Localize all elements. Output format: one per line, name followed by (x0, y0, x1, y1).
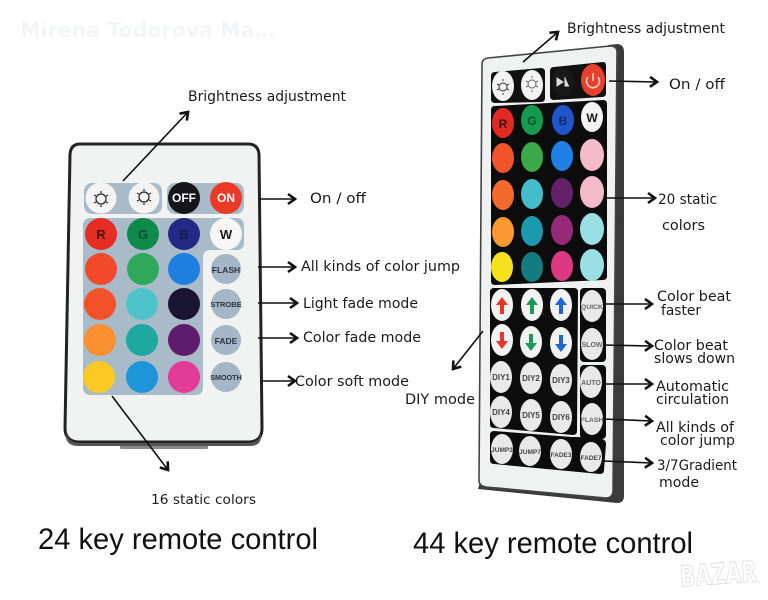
label: 20 static colors: colors (662, 218, 705, 234)
arrow: color beat slows (603, 345, 652, 346)
label: gradient mode: mode (659, 475, 699, 491)
label: color jump right: color jump (660, 433, 735, 449)
mode buttons: FLASH (212, 265, 240, 275)
DIY buttons: DIY3 (552, 376, 570, 385)
colour buttons (83, 218, 242, 393)
label: color jump left: All kinds of color jump (301, 259, 460, 275)
label: color fade: Color fade mode (303, 330, 421, 346)
speed and function buttons: FLASH (581, 417, 603, 424)
title: 24 key remote control: 24 key remote control (38, 523, 318, 556)
label: color soft: Color soft mode (295, 374, 409, 390)
top right button group (550, 62, 606, 100)
colour buttons: B (179, 227, 189, 242)
arrow: on off right (609, 81, 657, 82)
arrow buttons (491, 289, 572, 359)
colour panel (491, 100, 607, 285)
remote body (479, 46, 617, 498)
colour buttons (491, 102, 604, 282)
jump panel (490, 431, 606, 474)
DIY buttons: DIY5 (522, 411, 540, 420)
speed and function buttons: QUICK (581, 304, 603, 311)
jump and fade buttons: JUMP3 (491, 447, 513, 454)
jump and fade buttons: FADE3 (551, 452, 572, 459)
arrow: 20 static colors (605, 197, 655, 199)
colour button panel (83, 218, 244, 395)
label: brightness right: Brightness adjustment (567, 21, 726, 37)
panel: 24 key remote (65, 144, 262, 449)
label: color beat faster: faster (661, 303, 701, 319)
brightness button group (84, 182, 162, 214)
arrow: DIY mode (453, 331, 483, 369)
jump and fade buttons (491, 434, 602, 472)
top left button group (491, 68, 545, 103)
colour buttons: B (559, 114, 568, 128)
arrow: brightness left (123, 112, 188, 181)
colour buttons: W (220, 227, 233, 242)
arrow: color beat faster (603, 303, 652, 305)
arrow: color jump right (603, 419, 652, 421)
speed and function buttons: SLOW (582, 342, 603, 349)
mode buttons: STROBE (210, 300, 242, 309)
arrow: brightness right (523, 32, 558, 62)
arrow: color soft (260, 380, 295, 382)
label: color beat slows (654, 338, 735, 367)
arrow: light fade (258, 302, 297, 304)
arrow: color jump left (258, 266, 295, 268)
speed and function buttons (580, 290, 603, 435)
remote bottom edge (66, 432, 261, 446)
label: light fade: Light fade mode (303, 296, 418, 312)
label: on off left: On / off (310, 191, 366, 207)
DIY buttons: DIY2 (522, 374, 540, 383)
DIY buttons: DIY6 (552, 413, 570, 422)
mode buttons: SMOOTH (210, 373, 242, 382)
label: automatic circulation: Automatic (656, 379, 729, 395)
colour buttons: R (96, 227, 106, 242)
remote body (65, 144, 262, 442)
label: color beat slows: Color beat (654, 338, 729, 354)
top buttons (492, 64, 605, 101)
colour buttons: G (527, 114, 537, 128)
label: gradient mode (657, 458, 737, 491)
arrow: gradient mode (603, 461, 652, 463)
power button group: ON (217, 191, 235, 205)
arrow and DIY panel (490, 288, 578, 435)
DIY buttons: DIY1 (492, 373, 510, 382)
watermark: seller name: Mirena Todorova Ma… (20, 18, 275, 42)
arrow: 16 static colors (112, 396, 168, 470)
label: on off right: On / off (669, 77, 725, 93)
colour buttons: G (138, 227, 148, 242)
label: automatic circulation (656, 379, 729, 408)
colour buttons: W (586, 111, 598, 125)
arrow: automatic circulation (603, 383, 652, 385)
label: color beat slows: slows down (654, 351, 735, 367)
speed and function buttons: AUTO (581, 380, 601, 387)
label: 20 static colors: 20 static (658, 192, 717, 208)
label: 16 static colors: 16 static colors (151, 493, 256, 508)
label: color beat faster: Color beat (657, 289, 732, 305)
panel: 44 key remote (478, 44, 624, 503)
DIY buttons (490, 361, 572, 433)
colour buttons: R (499, 117, 508, 131)
label: brightness left: Brightness adjustment (188, 89, 347, 105)
arrow: color fade (258, 337, 297, 339)
arrow: on off left (259, 198, 295, 200)
power button group (167, 182, 244, 214)
label: color jump right: All kinds of (656, 420, 735, 436)
DIY buttons: DIY4 (492, 408, 510, 417)
power button group: OFF (172, 191, 196, 205)
remote bottom tab (120, 442, 208, 449)
label: color beat faster (657, 289, 732, 319)
mode buttons (210, 254, 242, 392)
jump and fade buttons: FADE7 (581, 455, 602, 462)
mode buttons: FADE (215, 336, 238, 346)
remote side shadow (478, 44, 624, 503)
auto panel (580, 365, 606, 439)
jump and fade buttons: JUMP7 (519, 449, 541, 456)
label: 20 static colors (658, 192, 717, 234)
label: automatic circulation: circulation (656, 392, 729, 408)
label: DIY mode: DIY mode (405, 392, 475, 408)
label: color jump right (656, 420, 735, 449)
speed panel (580, 288, 606, 362)
title: 44 key remote control: 44 key remote control (413, 527, 693, 560)
label: gradient mode: 3/7Gradient (657, 458, 737, 474)
